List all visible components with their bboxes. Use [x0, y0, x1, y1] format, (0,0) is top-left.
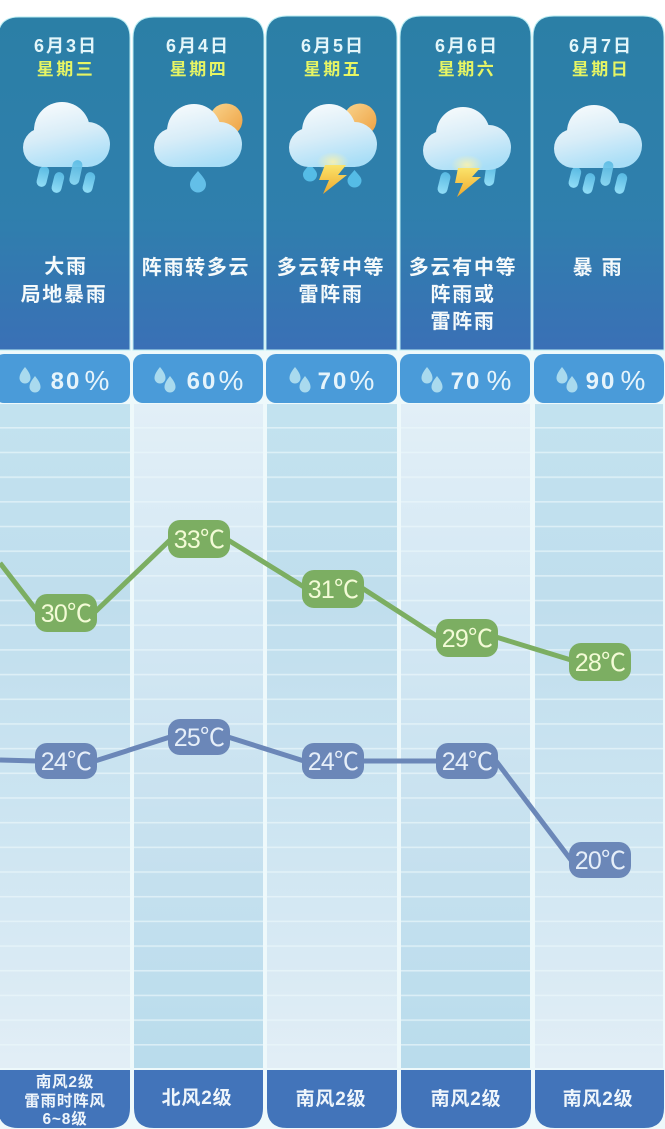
weather description June 6: 雷阵雨 [430, 310, 496, 333]
humidity June 7: % [621, 365, 645, 396]
icon: heavy rain cloud [23, 102, 110, 194]
high 30: 30℃ [41, 600, 91, 628]
icon: heavy rain cloud [554, 105, 642, 195]
humidity June 6: % [487, 365, 511, 396]
weather description June 3 [21, 255, 107, 306]
low 24: 24℃ [442, 748, 492, 776]
low 20 [569, 842, 631, 878]
icon: thunder shower with sun [289, 104, 377, 194]
weather description June 6: 阵雨或 [430, 282, 496, 306]
date June 4: 6月4日 [166, 36, 230, 56]
high 29: 29℃ [442, 625, 492, 653]
wind June 7 [535, 1070, 664, 1128]
humidity June 6 [400, 354, 530, 403]
high 28: 28℃ [575, 649, 625, 677]
page gutter background [0, 340, 665, 1129]
humidity June 5 [266, 354, 397, 403]
weekday June 3: 星期三 [37, 60, 95, 79]
wind June 4: 北风2级 [162, 1086, 232, 1109]
date June 3: 6月3日 [34, 36, 98, 56]
icon: sun cloud shower [154, 104, 242, 192]
humidity June 3 [0, 354, 130, 403]
wind June 6: 南风2级 [431, 1087, 501, 1110]
wind June 5 [267, 1070, 397, 1128]
header panel June 3 [0, 17, 130, 350]
low 25 [168, 719, 230, 755]
humidity June 5: % [350, 365, 374, 396]
humidity June 5: 70 [318, 368, 348, 395]
humidity June 3: 80 [51, 368, 81, 395]
wind June 7: 南风2级 [563, 1087, 633, 1110]
temperature background column June 4 [134, 404, 263, 1068]
date June 6: 6月6日 [435, 36, 499, 56]
humidity June 7: 90 [586, 368, 616, 395]
wind June 3: 6~8级 [42, 1109, 88, 1128]
humidity June 6: 70 [451, 368, 481, 395]
header panel June 7 [533, 16, 664, 350]
weather description June 3: 局地暴雨 [21, 283, 107, 306]
low 20: 20℃ [575, 847, 625, 875]
high 29 [436, 619, 498, 657]
wind June 3: 南风2级 [36, 1072, 94, 1091]
wind June 3 [0, 1070, 130, 1128]
weather description June 5 [277, 256, 385, 306]
high 31: 31℃ [308, 576, 358, 604]
temperature background column June 7 [535, 404, 663, 1068]
weekday June 7: 星期日 [572, 60, 630, 79]
low 24: 24℃ [308, 748, 358, 776]
column: June 6 [400, 16, 531, 1128]
wind June 5: 南风2级 [296, 1087, 366, 1110]
weather description June 3: 大雨 [44, 255, 88, 278]
column: June 5 [266, 16, 397, 1128]
low 24 [302, 743, 364, 779]
weekday June 4: 星期四 [170, 60, 228, 79]
high 31 [302, 570, 364, 608]
icon: thunder rain cloud [423, 107, 511, 197]
header panel June 6 [400, 16, 531, 350]
humidity June 4 [133, 354, 263, 403]
wind June 3: 雷雨时阵风 [24, 1092, 106, 1110]
temperature background column June 6 [401, 404, 530, 1068]
header panel June 4 [133, 17, 264, 350]
weekday June 5: 星期五 [304, 60, 362, 79]
low 25: 25℃ [174, 724, 224, 752]
high temperature line chart [0, 520, 631, 681]
low 24 [35, 743, 97, 779]
high 33: 33℃ [174, 526, 224, 554]
date June 7: 6月7日 [569, 36, 633, 56]
humidity June 4: 60 [187, 368, 217, 395]
wind June 4 [134, 1070, 263, 1128]
high 28 [569, 643, 631, 681]
humidity June 3: % [85, 365, 109, 396]
column: June 4 [133, 17, 264, 1128]
weather description June 6 [409, 256, 517, 333]
humidity June 7 [534, 354, 664, 403]
low temperature line chart [0, 719, 631, 878]
humidity June 4: % [219, 365, 243, 396]
high 33 [168, 520, 230, 558]
temperature background column June 5 [267, 404, 397, 1068]
high 30 [35, 594, 97, 632]
weather description June 5: 多云转中等 [277, 256, 385, 279]
column: June 7 [533, 16, 664, 1128]
date June 5: 6月5日 [301, 36, 365, 56]
weather description June 4: 阵雨转多云 [142, 256, 250, 279]
weekday June 6: 星期六 [438, 60, 496, 79]
weather description June 6: 多云有中等 [409, 256, 517, 279]
weather description June 7: 暴 雨 [573, 256, 623, 279]
low 24: 24℃ [41, 748, 91, 776]
column: June 3 [0, 17, 130, 1128]
temperature background column June 3 [0, 404, 130, 1068]
weather description June 5: 雷阵雨 [298, 283, 364, 306]
low 24 [436, 743, 498, 779]
wind June 6 [401, 1070, 531, 1128]
header panel June 5 [266, 16, 397, 350]
